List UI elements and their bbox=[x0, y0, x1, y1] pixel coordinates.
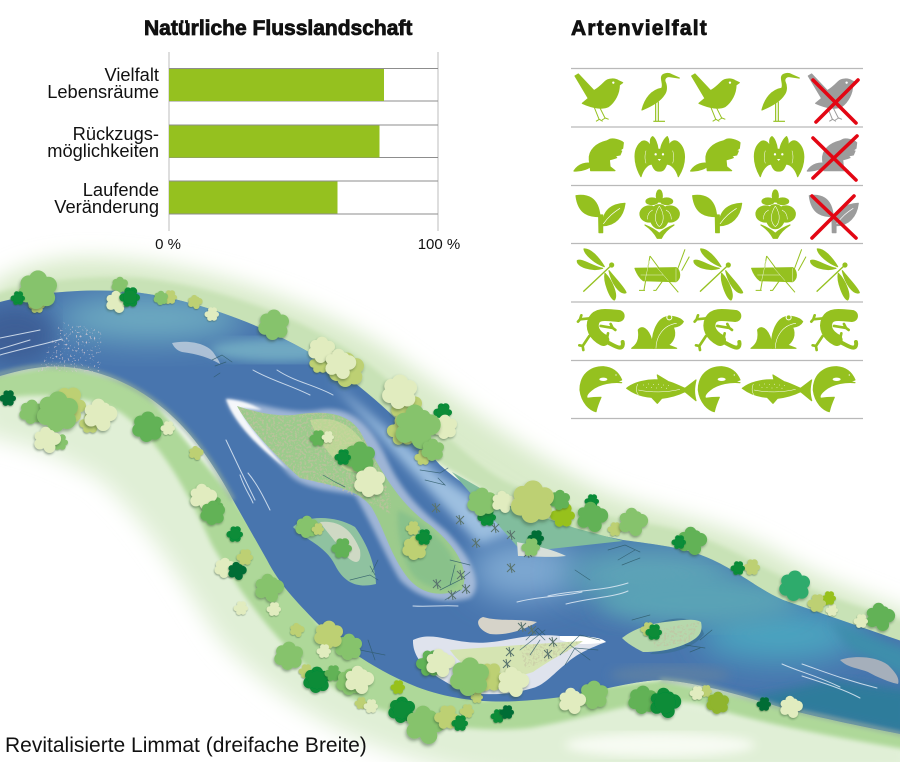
gravel bank upper wedge bbox=[517, 542, 566, 557]
trees: upper bank far right bbox=[672, 527, 895, 631]
axis label: 0 %: 0 % bbox=[155, 236, 181, 253]
island sandy texture bbox=[237, 406, 391, 515]
main island bbox=[226, 399, 476, 601]
island green ground bbox=[237, 406, 464, 594]
icons: birds bbox=[575, 74, 856, 121]
island lavender halo bbox=[226, 399, 476, 601]
branches and driftwood bbox=[212, 355, 712, 665]
island white tip bbox=[226, 399, 288, 470]
bar: Vielfalt Lebensräume: Vielfalt bbox=[104, 64, 159, 85]
trees: main island bbox=[309, 430, 432, 560]
trees: lower bank right bbox=[628, 622, 803, 718]
species grid bbox=[571, 68, 863, 418]
bar: Laufende Veränderung: Laufende bbox=[83, 179, 159, 200]
heading: biodiversity: Artenvielfalt bbox=[571, 17, 708, 40]
bar: Rückzugsmöglichkeiten bbox=[47, 123, 380, 161]
icons: insects bbox=[577, 249, 859, 300]
bar: Vielfalt Lebensräume bbox=[47, 64, 384, 102]
bar: Laufende Veränderung bbox=[54, 179, 338, 217]
lower bank: green band bbox=[0, 365, 900, 752]
icons: fish bbox=[580, 367, 855, 412]
reed speckles upper left bbox=[38, 322, 102, 372]
side channel green wedge bbox=[452, 472, 623, 552]
water waves bbox=[0, 330, 877, 698]
landscape: river with banks bbox=[0, 258, 900, 762]
bar: Laufende Veränderung: Veränderung bbox=[54, 196, 159, 217]
trees: lower bank left bbox=[0, 388, 225, 525]
lower bank: pale gap bbox=[565, 733, 755, 757]
bar: Vielfalt Lebensräume: Lebensräume bbox=[47, 81, 159, 102]
trees: bottom island bbox=[416, 649, 529, 703]
bottom island bbox=[413, 635, 606, 694]
trees: lower bank curve bbox=[214, 526, 405, 713]
trees: upper bank right cluster bbox=[467, 480, 648, 556]
lower bank edge highlight bbox=[0, 366, 900, 736]
gravel bank centre bbox=[478, 617, 537, 634]
heading: natural river landscape: Natürliche Flusslandschaft bbox=[144, 17, 412, 40]
gravel bank right bbox=[840, 657, 898, 684]
island lower lobe shade bbox=[398, 510, 458, 588]
trees: upper bank middle bbox=[308, 337, 457, 465]
upper bank: pale outer green bbox=[0, 258, 900, 660]
icons: plants bbox=[576, 190, 858, 238]
lower bank: pale outer green bbox=[0, 370, 900, 762]
branch marks bbox=[432, 503, 557, 669]
axis label: 100 %: 100 % bbox=[418, 236, 460, 253]
icons: mammals bbox=[574, 137, 857, 177]
second island bbox=[293, 518, 376, 586]
bar chart bbox=[47, 52, 460, 253]
trees: upper bank left bbox=[11, 270, 289, 340]
upper bank: green band bbox=[0, 277, 900, 660]
red crosses: lost species bbox=[812, 80, 858, 238]
trees: second island bbox=[295, 516, 352, 558]
bar: Rückzugsmöglichkeiten: möglichkeiten bbox=[47, 140, 159, 161]
icons: amphibians bbox=[578, 314, 856, 350]
gravel bank left bbox=[172, 342, 220, 364]
river water bbox=[0, 280, 900, 750]
small island right bbox=[622, 618, 704, 654]
trees: lower bank centre bbox=[388, 681, 608, 744]
bar: Rückzugsmöglichkeiten: Rückzugs- bbox=[73, 123, 159, 144]
caption: Revitalisierte Limmat (dreifache Breite) bbox=[5, 734, 367, 757]
